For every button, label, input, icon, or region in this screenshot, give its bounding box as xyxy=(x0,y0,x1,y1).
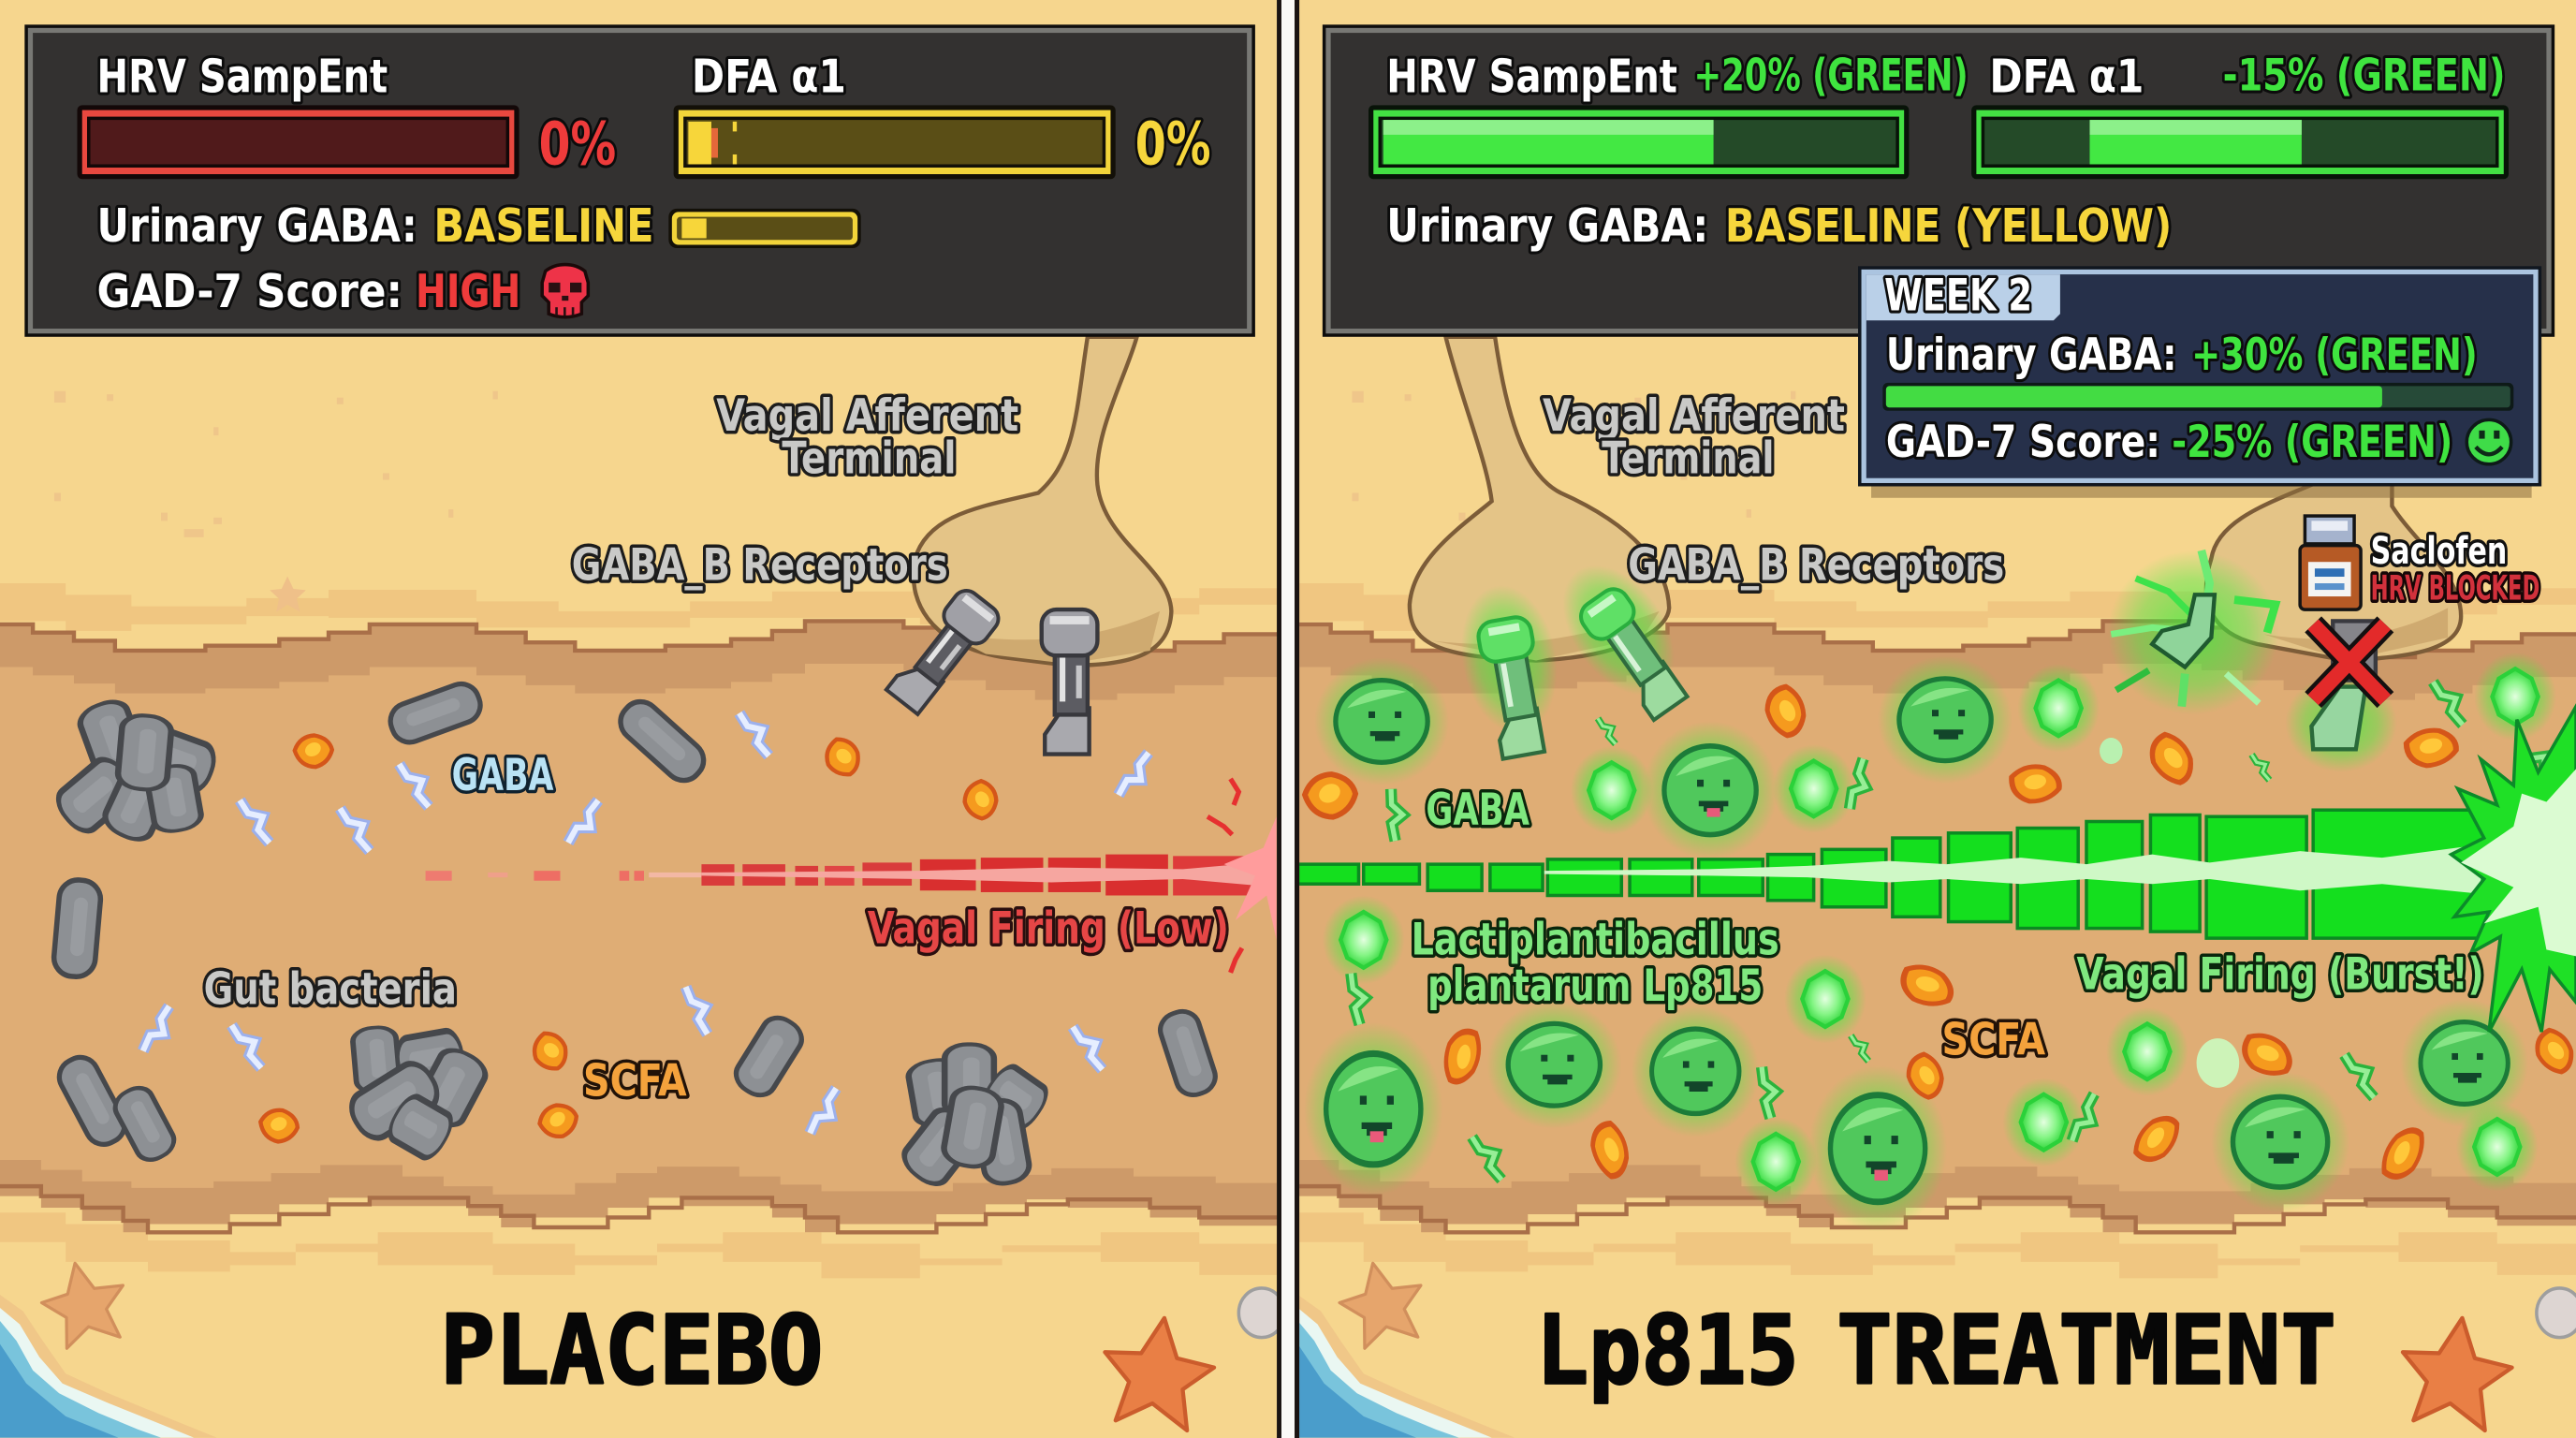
label: DFA alpha 1: DFA α1 xyxy=(692,49,846,103)
panel divider xyxy=(1277,0,1299,1438)
label: GABA_B Receptors: GABA_B Receptors xyxy=(572,540,948,592)
bar: DFA alpha 1 -15% xyxy=(1971,105,2509,179)
value: +30% green: +30% (GREEN) xyxy=(2191,330,2478,381)
value: BASELINE (YELLOW): BASELINE (YELLOW) xyxy=(1725,198,2172,253)
panel: Lp815 treatment xyxy=(1299,337,2576,1438)
label: Vagal Afferent Terminal: Terminal xyxy=(1602,433,1775,484)
gut bacteria xyxy=(51,679,1220,1191)
label: Lactiplantibacillus plantarum Lp815: plantarum Lp815 xyxy=(1427,961,1763,1012)
label: GABA: GABA xyxy=(1426,785,1530,836)
GABA_B receptor 2 xyxy=(1042,609,1097,755)
icon: Saclofen vial xyxy=(2300,516,2361,609)
label: HRV SampEnt: HRV SampEnt xyxy=(97,49,388,103)
panel shadow xyxy=(1871,477,2532,498)
value: -25% green: -25% (GREEN) xyxy=(2172,417,2452,468)
HUD frame xyxy=(1323,24,2554,337)
label: HRV SampEnt: HRV SampEnt xyxy=(1386,49,1677,103)
icon: skull xyxy=(542,265,588,317)
label: Lactiplantibacillus plantarum Lp815 xyxy=(1412,915,1779,1012)
blocked receptor with sparks xyxy=(2108,550,2278,714)
title: Lp815 TREATMENT xyxy=(1536,1297,2336,1407)
label: GAD-7 Score: GAD-7 Score: xyxy=(1886,417,2160,468)
title: Lp815 TREATMENT: TREATMENT xyxy=(1837,1297,2336,1407)
icon: smiley xyxy=(2466,419,2511,464)
bar: HRV SampEnt +20% xyxy=(1368,105,1909,179)
HUD frame xyxy=(24,24,1255,337)
label: Urinary GABA: Urinary GABA: xyxy=(1886,330,2177,381)
label: GABA: GABA xyxy=(452,750,553,801)
icon: red X xyxy=(2313,624,2385,700)
burst star xyxy=(2452,707,2576,1032)
SCFA molecules xyxy=(257,728,1003,1146)
panel: placebo xyxy=(0,337,1277,1438)
label: DFA alpha 1: DFA α1 xyxy=(1989,49,2144,103)
label: Vagal Firing (Low): Vagal Firing (Low) xyxy=(868,902,1229,954)
HUD: treatment xyxy=(1323,24,2554,337)
faint starfish in sand xyxy=(270,577,305,598)
bar: Urinary GABA baseline xyxy=(668,209,861,248)
tab: WEEK 2: WEEK 2 xyxy=(1884,271,2032,322)
value: -15% green: -15% (GREEN) xyxy=(2223,51,2506,102)
label: Vagal Firing (Burst!): Vagal Firing (Burst!) xyxy=(2076,949,2484,1001)
bar: HRV SampEnt 0% xyxy=(77,105,520,179)
label: Vagal Afferent Terminal: Vagal Afferent xyxy=(1543,390,1845,442)
HUD: placebo xyxy=(24,24,1255,337)
label: GAD-7 Score: GAD-7 Score: xyxy=(97,264,402,318)
label: Vagal Afferent Terminal xyxy=(716,390,1018,484)
value: HIGH: HIGH xyxy=(416,264,520,318)
label: Urinary GABA: Urinary GABA: xyxy=(97,198,417,253)
label: Urinary GABA: Urinary GABA: xyxy=(1386,198,1708,253)
panel background: sand and gut lumen xyxy=(0,391,1277,1438)
title: PLACEBO: PLACEBO xyxy=(440,1297,823,1407)
label: SCFA: SCFA xyxy=(583,1056,687,1108)
blocked receptor under X xyxy=(2285,621,2397,772)
value: DFA 0%: 0% xyxy=(1135,110,1211,179)
GABA molecules (glowing) xyxy=(1323,653,2559,1206)
GABA_B receptor 1 xyxy=(884,585,1003,719)
title: Lp815 TREATMENT: Lp815 xyxy=(1536,1297,1799,1407)
label: GABA_B Receptors: GABA_B Receptors xyxy=(1628,540,2004,592)
panel frame xyxy=(1858,266,2541,486)
vagal afferent terminal xyxy=(914,337,1171,666)
label: Lactiplantibacillus plantarum Lp815: Lactiplantibacillus xyxy=(1412,915,1779,966)
panel background: sand and gut lumen xyxy=(1299,391,2576,1438)
bar: DFA alpha 1 0% xyxy=(674,105,1116,179)
SCFA molecules xyxy=(1300,683,2576,1183)
label: Vagal Afferent Terminal: Vagal Afferent xyxy=(716,390,1018,442)
vagal afferent terminal (left) xyxy=(1410,337,1669,661)
value: HRV 0%: 0% xyxy=(539,110,616,179)
vagal afferent terminal (right) xyxy=(2206,479,2461,661)
panel: Week 2 xyxy=(1858,266,2541,498)
Lp815 bacteria xyxy=(1304,655,2528,1232)
active GABA_B receptor 2 xyxy=(1565,568,1690,723)
active GABA_B receptor 1 xyxy=(1464,588,1555,761)
label: SCFA: SCFA xyxy=(1942,1015,2045,1066)
label: Vagal Afferent Terminal: Terminal xyxy=(782,433,956,484)
vagal firing beam (low) xyxy=(426,779,1277,973)
vagal firing beam (burst) xyxy=(1298,810,2492,938)
value: BASELINE: BASELINE xyxy=(433,198,654,253)
label: Gut bacteria: Gut bacteria xyxy=(204,963,457,1015)
GABA molecules xyxy=(130,713,1159,1133)
label: Saclofen: Saclofen xyxy=(2371,529,2507,573)
value: +20% green: +20% (GREEN) xyxy=(1694,51,1969,102)
bar: Urinary GABA +30% xyxy=(1882,383,2513,411)
beam core xyxy=(1544,844,2481,894)
label: Vagal Afferent Terminal xyxy=(1543,390,1845,484)
